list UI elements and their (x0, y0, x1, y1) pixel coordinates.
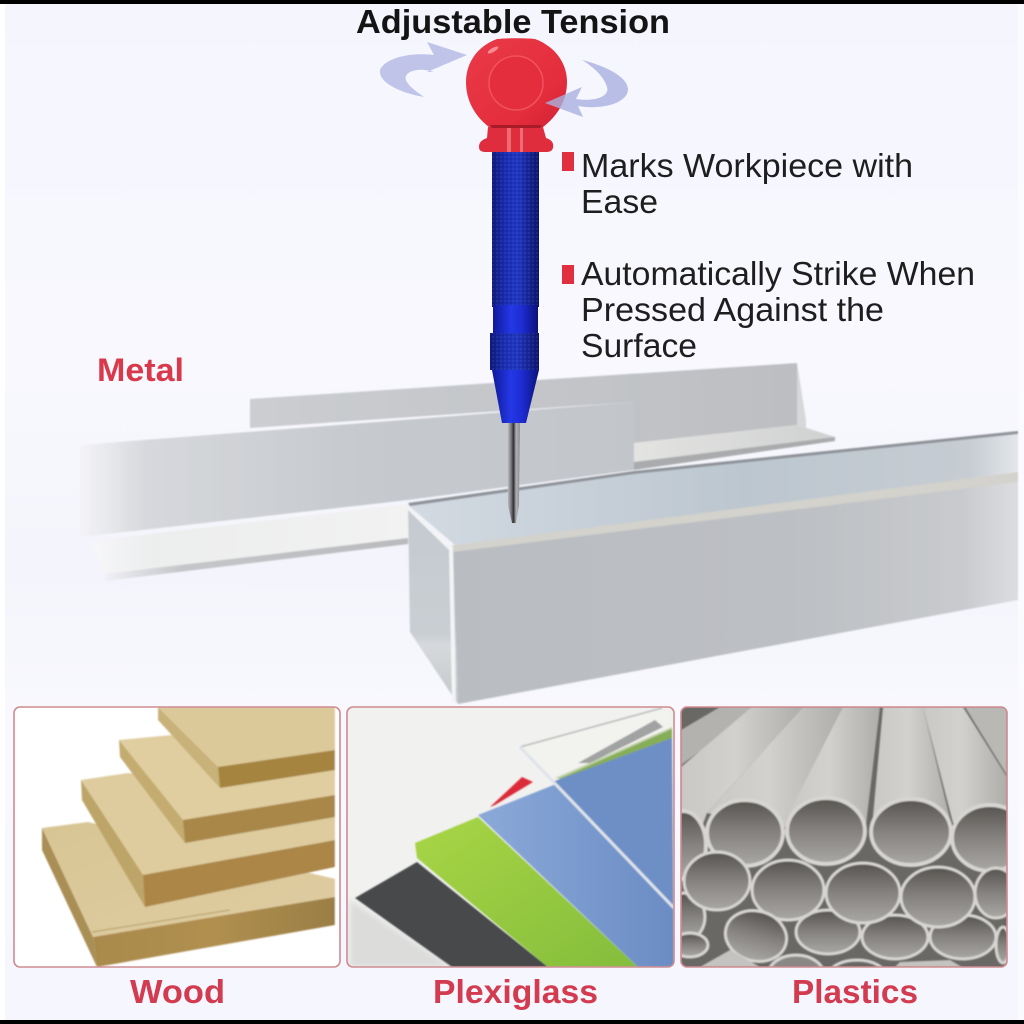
icon: rotation arrow right (545, 60, 628, 117)
panel: plastics (680, 706, 1008, 1004)
bullet: automatic strike: Pressed Against the (581, 291, 884, 328)
panel: wood (14, 707, 340, 1010)
wood frame (14, 707, 340, 967)
bullet: marks workpiece (562, 147, 913, 220)
bullet: automatic strike (562, 255, 975, 364)
label: plastics: Plastics (792, 973, 918, 1010)
bullet: marks workpiece: Marks Workpiece with (581, 147, 913, 184)
panel: plexiglass (347, 707, 674, 1010)
label: metal: Metal (97, 352, 184, 388)
front metal angle (80, 402, 634, 581)
label: wood: Wood (130, 973, 225, 1010)
title: Adjustable Tension (356, 3, 670, 40)
back metal angle (250, 363, 835, 470)
metal scene (80, 363, 1018, 704)
icon: rotation arrow left (380, 42, 467, 97)
pvc pipes photo (682, 708, 1006, 966)
steel tip (507, 423, 520, 523)
wood boards photo (14, 707, 340, 967)
bullet: marks workpiece: Ease (581, 183, 658, 220)
plastics frame (681, 707, 1007, 967)
red knob (466, 38, 567, 152)
tool: automatic center punch (380, 38, 628, 523)
acrylic sheets photo (347, 707, 674, 967)
plexiglass frame (347, 707, 674, 967)
bullet: automatic strike: Automatically Strike When (581, 255, 975, 292)
square aluminium tube (408, 431, 1018, 704)
blue barrel (490, 152, 539, 423)
bullet: automatic strike: Surface (581, 327, 697, 364)
label: plexiglass: Plexiglass (433, 973, 598, 1010)
feature list (562, 147, 975, 364)
